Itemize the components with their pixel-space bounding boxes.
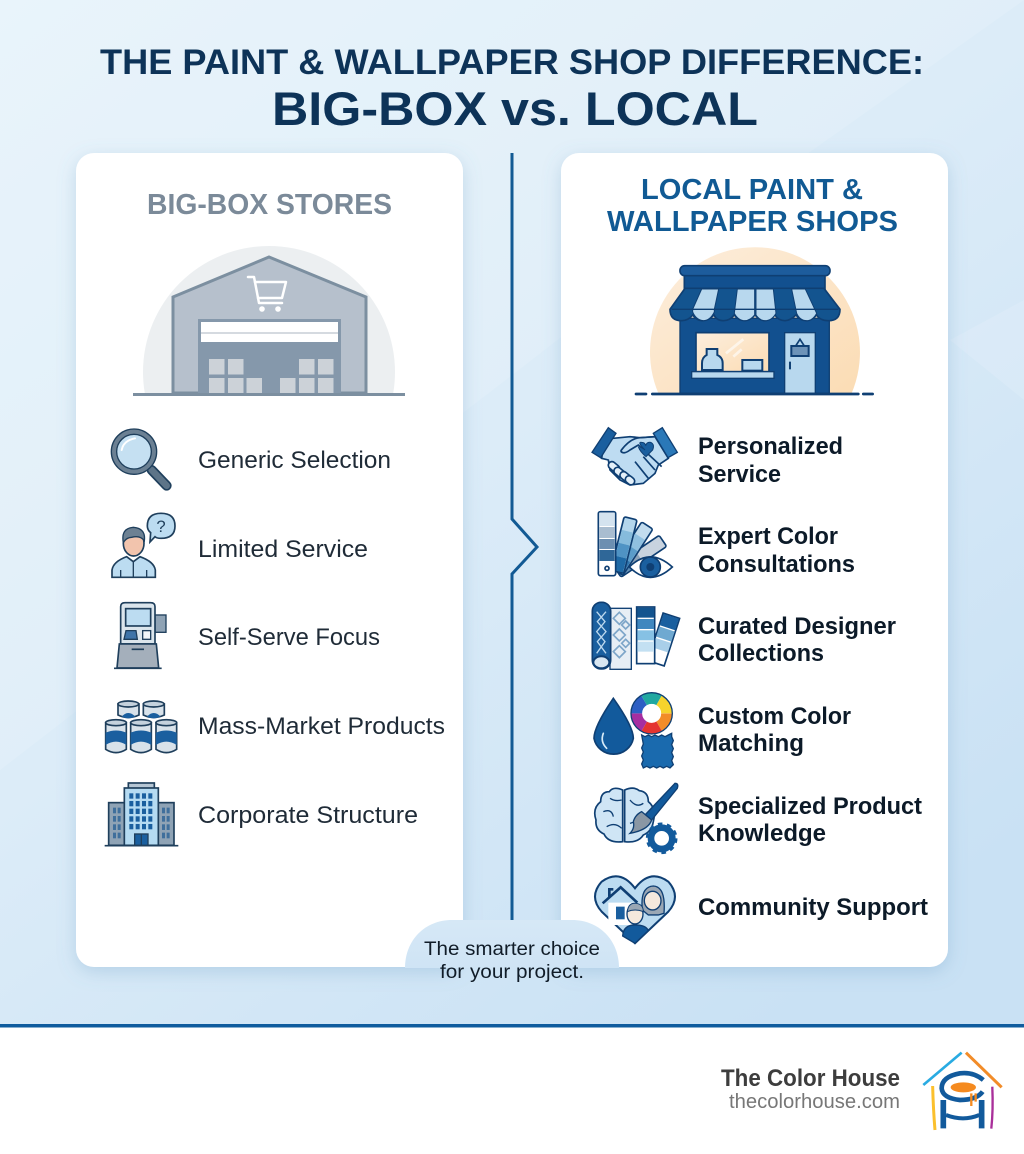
list: local shop features: Custom Color xyxy=(698,703,851,730)
icon: person with question xyxy=(112,513,175,577)
list: local shop features: Curated Designer xyxy=(698,613,896,640)
icon: brain, brush and gear xyxy=(595,783,678,852)
icon: person with question: ? xyxy=(156,517,166,536)
list: local shop features: Personalized xyxy=(698,433,843,460)
list: local shop features: Service xyxy=(698,461,781,488)
icon: self-serve kiosk xyxy=(114,603,166,668)
callout: smarter choice: The smarter choice xyxy=(424,939,600,960)
list: local shop features: Consultations xyxy=(698,551,855,578)
list: local shop features: Knowledge xyxy=(698,820,826,847)
brand name: The Color House xyxy=(721,1065,900,1092)
list: big-box features: Corporate Structure xyxy=(198,802,418,829)
brand url: thecolorhouse.com xyxy=(729,1091,900,1113)
callout: smarter choice xyxy=(405,920,619,983)
icon: paint cans xyxy=(106,701,177,753)
heading: local shops: WALLPAPER SHOPS xyxy=(607,206,898,238)
callout: smarter choice: for your project. xyxy=(440,962,584,983)
list: local shop features: Matching xyxy=(698,730,804,757)
heading: big-box stores: BIG-BOX STORES xyxy=(147,189,392,221)
panel: big-box stores xyxy=(76,153,463,967)
divider arrow xyxy=(512,153,537,921)
footer xyxy=(0,1024,1024,1154)
title: THE PAINT & WALLPAPER SHOP DIFFERENCE: xyxy=(100,43,924,82)
list: local shop features xyxy=(698,433,928,921)
list: big-box features xyxy=(198,447,445,829)
icon: drop, colour wheel and swatch xyxy=(594,693,673,768)
icon: magnifier xyxy=(114,432,167,486)
list: big-box features: Generic Selection xyxy=(198,447,391,474)
icon: handshake xyxy=(592,428,677,486)
list: big-box features: Self-Serve Focus xyxy=(198,624,380,651)
title xyxy=(100,43,924,135)
heading: local shops: LOCAL PAINT & xyxy=(641,174,863,206)
list: big-box features: Mass-Market Products xyxy=(198,713,445,740)
heading: local shops xyxy=(607,174,898,238)
title: BIG-BOX vs. LOCAL xyxy=(272,82,758,135)
list: local shop features: Expert Color xyxy=(698,523,838,550)
list: big-box features: Limited Service xyxy=(198,536,368,563)
logo xyxy=(923,1053,1002,1130)
list: local shop features: Collections xyxy=(698,640,824,667)
icon: designer collections xyxy=(592,602,680,669)
illustration: storefront xyxy=(636,247,873,394)
icon: community heart xyxy=(595,876,675,943)
panel: local shops xyxy=(561,153,948,967)
list: local shop features: Community Support xyxy=(698,894,928,921)
illustration: warehouse xyxy=(133,246,405,396)
icon: corporate building xyxy=(105,783,178,846)
icon: swatches and eye xyxy=(598,512,672,577)
list: local shop features: Specialized Product xyxy=(698,793,922,820)
